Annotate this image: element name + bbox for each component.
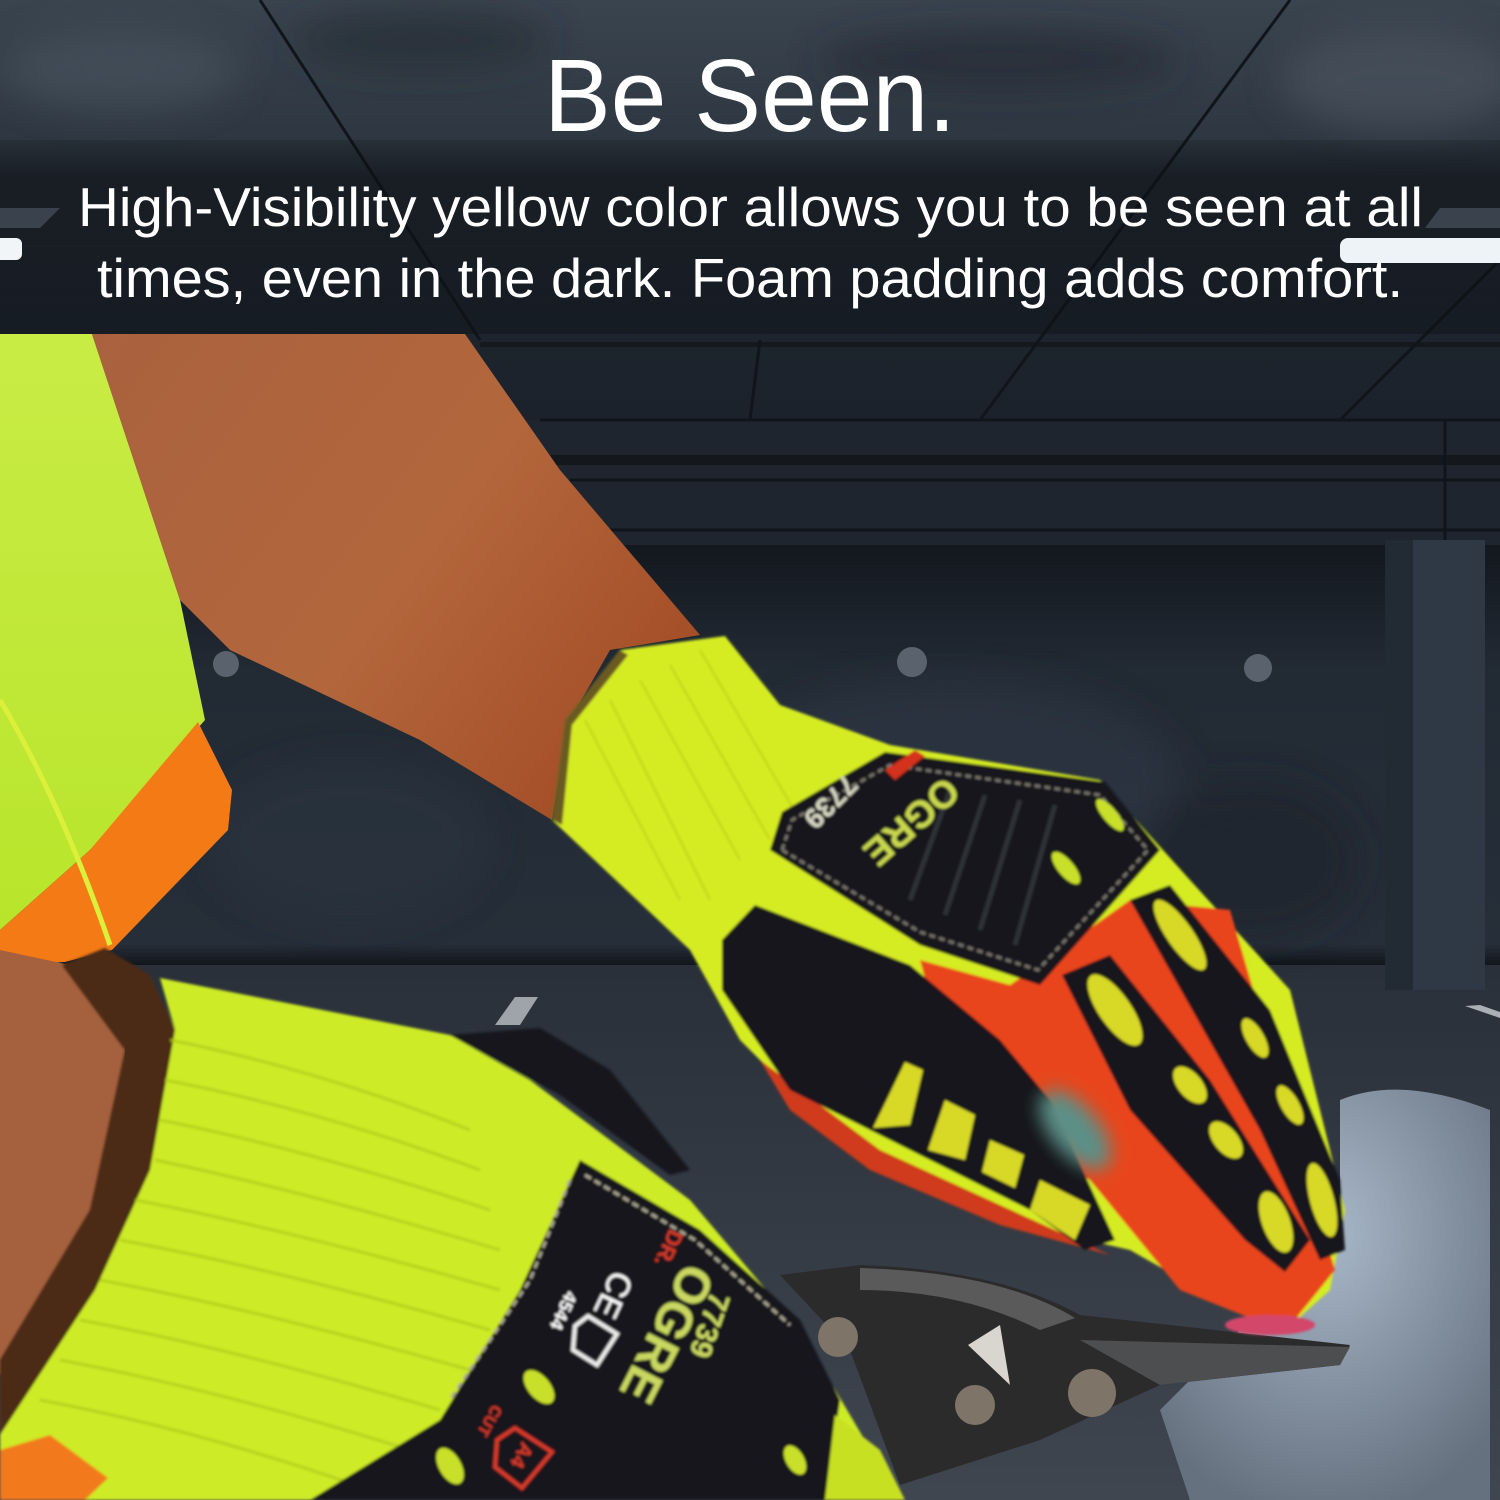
rating number: 4544 [546,1288,581,1333]
red logo: DR. [649,1226,688,1271]
arm upper [92,334,700,820]
body text: times, even in the dark. Foam padding adds comfort. [97,247,1403,309]
body text [78,176,1423,309]
cut rating icon: A4 [505,1438,537,1472]
upper glove [552,636,1345,1335]
green finger tip [825,1415,905,1500]
middle finger yellow pads [1145,893,1343,1240]
guard pads [430,1365,811,1489]
knit body [0,978,900,1500]
body text: High-Visibility yellow color allows you to be seen at all [78,176,1423,238]
CE mark: CE [586,1265,640,1324]
knuckle guard [770,752,1160,985]
shears [780,1265,1350,1485]
cuff edge [552,650,628,825]
brand on guard: OGRE [609,1255,726,1412]
header dark band [0,140,1500,334]
model number on guard: 7739 [683,1288,735,1362]
knuckle pads [1047,795,1128,888]
red palm and fingers [920,900,1335,1332]
cuff ribs [585,650,800,900]
red logo mark on knuckle guard [885,750,925,780]
arm lower [0,950,125,1375]
title: Be Seen. [544,38,956,153]
guard ribs [910,790,1055,945]
shirt: high-visibility vest [0,334,232,965]
thumb guard [722,905,1115,1250]
index finger yellow pads [1078,966,1300,1257]
lower palm red strip [760,1060,1110,1255]
cut rating icon [495,1428,552,1488]
orange patch [0,1435,108,1500]
knit ribs [40,1040,500,1490]
guard stitching [782,765,1148,970]
middle finger guard [1130,885,1345,1260]
thumb yellow stripes [873,1062,1090,1240]
brown cuff edge [0,948,175,1435]
brand on knuckle guard: OGRE [855,768,967,874]
back-of-hand guard top [450,1028,690,1175]
shield icon [573,1316,617,1365]
fingertip highlight [1225,1315,1315,1335]
guard stitching [450,1175,790,1400]
back-of-hand guard [310,1160,840,1500]
thumb web shadow [1026,1078,1124,1182]
glove cuff and body [552,636,1345,1335]
index finger guard [1062,955,1310,1272]
cut label: CUT [473,1402,504,1439]
model number on knuckle guard: 7739 [798,769,864,835]
lower glove [0,948,905,1500]
metal sheet on floor [1160,1090,1490,1500]
